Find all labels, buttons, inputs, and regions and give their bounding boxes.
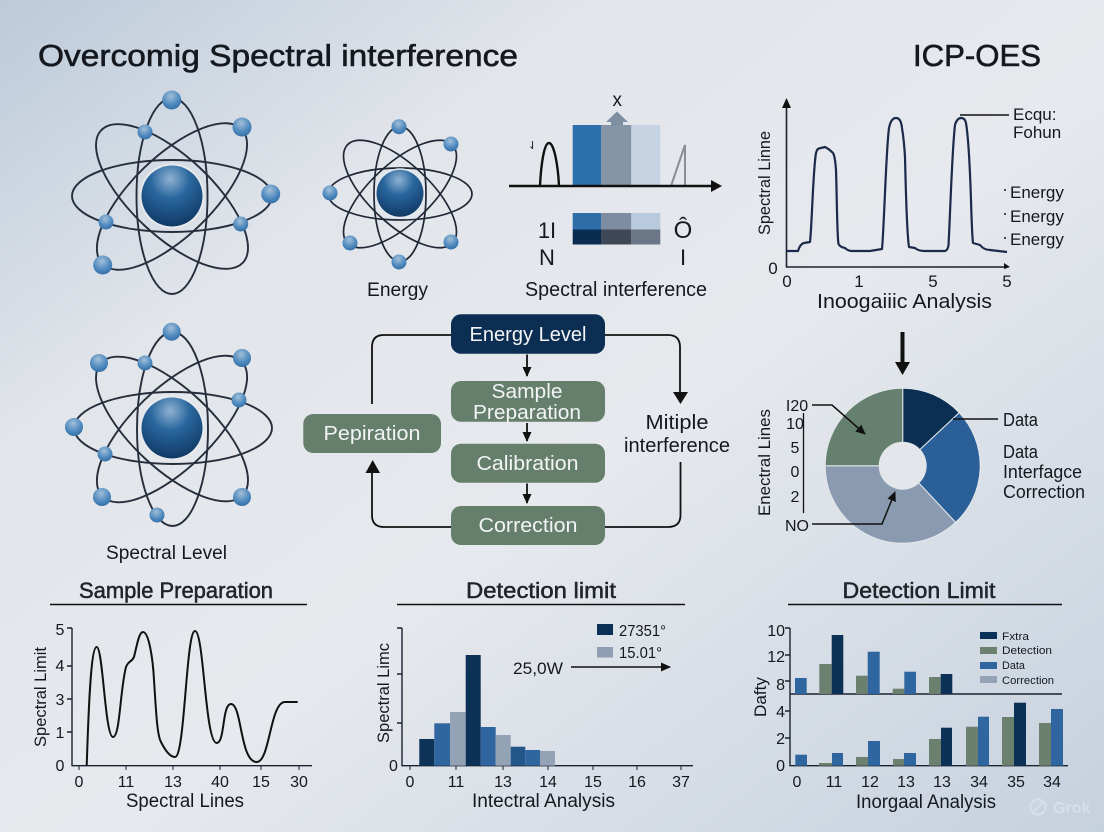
y scale labels: 0 (791, 464, 800, 481)
y scale labels: I20 (786, 398, 808, 415)
arrowhead left (366, 460, 380, 473)
axes (785, 628, 1068, 766)
y scale labels: NO (785, 518, 809, 535)
slice: navy (903, 388, 959, 466)
y axis title: Spectral Limit (31, 647, 50, 747)
callout labels (1004, 105, 1064, 249)
x tick labels: 12 (861, 774, 879, 791)
flowchart (303, 314, 730, 545)
y tick labels: 4 (776, 704, 785, 721)
x tick labels: 13 (897, 774, 915, 791)
x tick labels (406, 774, 690, 791)
donut legend text: Correction (1003, 482, 1085, 502)
donut legend text: Data (1003, 410, 1039, 430)
box: Energy Level (451, 314, 605, 354)
side labels (538, 216, 692, 270)
y scale labels: 10 (786, 416, 804, 433)
y axis title: Spectral Linne (755, 131, 774, 235)
scale line (802, 413, 804, 513)
upper bars (795, 635, 952, 694)
tick labels: 5 (928, 272, 938, 291)
y tick labels: 8 (776, 677, 785, 694)
x tick labels: 0 (75, 774, 84, 791)
label: Mitiple interference: Mitiple (646, 412, 708, 434)
x tick labels: 11 (118, 774, 134, 791)
label: Mitiple interference: interference (624, 435, 730, 457)
legend: Detection (1002, 645, 1052, 657)
x tick labels: 13 (494, 774, 512, 791)
tick labels (768, 259, 1012, 291)
axes (67, 628, 312, 766)
box: Energy Level: Energy Level (470, 324, 586, 346)
box: Sample Preparation: Sample (492, 381, 562, 403)
pointer 120 (812, 405, 865, 434)
connector: top left loop (372, 335, 451, 404)
label x: x (612, 90, 622, 111)
y tick labels: 3 (56, 692, 65, 709)
x tick labels: 13 (164, 774, 182, 791)
box: Pepiration (303, 414, 441, 453)
legend: Fxtra (1002, 631, 1030, 643)
y axis title: Dafty (751, 677, 770, 717)
chart: spectral interference diagram (509, 90, 722, 270)
arrow: calibration to correction (526, 484, 528, 503)
x tick labels: 30 (290, 774, 308, 791)
gray triangle peak (671, 145, 685, 186)
axes (397, 628, 693, 766)
watermark: Grok: Grok (1053, 800, 1090, 817)
chart: grouped bars bottom right (751, 623, 1068, 813)
x tick labels: 15 (584, 774, 602, 791)
x tick labels: 14 (539, 774, 557, 791)
x ticks (79, 766, 299, 770)
axis arrow (509, 185, 712, 187)
x tick labels: 34 (970, 774, 988, 791)
peak curve (540, 143, 559, 186)
x tick labels: 0 (793, 774, 802, 791)
x tick labels (793, 774, 1061, 791)
y tick labels: 0 (56, 758, 65, 775)
tick labels: 0 (782, 272, 792, 291)
arrowhead right (673, 392, 688, 404)
side labels: I (680, 245, 686, 270)
pointer data (953, 418, 998, 420)
box: Correction (451, 506, 605, 545)
curve (87, 631, 298, 766)
x tick labels: 11 (826, 774, 842, 791)
axes (786, 105, 1006, 267)
bars (419, 655, 555, 766)
arrow: down to pie chart (895, 332, 910, 375)
donut legend text: Interfagce (1003, 462, 1082, 482)
icon: small atom top center (322, 119, 473, 270)
lower bars (795, 703, 1063, 766)
small mark: ⇃ (528, 140, 537, 152)
x tick labels: 15 (252, 774, 270, 791)
arrow up (606, 112, 628, 125)
heading: Sample Preparation: Sample Preparation (79, 578, 273, 603)
y axis title: Enectral Lines (755, 409, 774, 516)
box: Calibration: Calibration (476, 453, 578, 475)
box: Sample Preparation: Preparation (473, 402, 581, 424)
chart: line chart bottom left (31, 622, 312, 812)
x tick labels: 37 (672, 774, 690, 791)
y tick labels: 12 (767, 649, 785, 666)
lower colour blocks (573, 213, 660, 244)
legend: 27351° (619, 623, 666, 640)
y scale labels (785, 398, 809, 535)
heading: Detection Limit: Detection Limit (842, 578, 996, 603)
slice: gray (825, 466, 956, 543)
x tick labels: 40 (211, 774, 229, 791)
chart: donut (755, 388, 1085, 543)
legend: Correction (1002, 675, 1054, 687)
donut legend text: Data (1003, 442, 1039, 462)
callout labels: Energy (1010, 230, 1064, 249)
tick labels: 5 (1002, 272, 1012, 291)
side labels: 1I (538, 218, 556, 243)
callout labels: Energy (1010, 207, 1064, 226)
y scale labels: 2 (791, 489, 800, 506)
donut legend text (1003, 410, 1085, 502)
box: Sample Preparation (451, 381, 605, 424)
legend (980, 631, 1054, 687)
callout labels: Ecqu: (1013, 105, 1056, 124)
donut hole (879, 442, 927, 490)
label: Spectral Level: Spectral Level (106, 543, 227, 564)
x axis title: Spectral Lines (126, 791, 244, 812)
y tick labels: 10 (767, 623, 785, 640)
arrow: sample to calibration (526, 423, 528, 441)
side labels: N (539, 245, 555, 270)
watermark: Grok (1030, 800, 1090, 817)
x axis arrowhead (1004, 263, 1010, 269)
x tick labels: 16 (628, 774, 646, 791)
x tick labels: 0 (406, 774, 415, 791)
legend: Data (1002, 660, 1026, 672)
title: Overcomig Spectral interference (38, 38, 518, 73)
x tick labels: 11 (448, 774, 464, 791)
label: Spectral interference: Spectral interference (525, 279, 707, 301)
legend (597, 623, 666, 662)
line series (787, 118, 1007, 252)
y tick labels: 0 (776, 758, 785, 775)
y tick labels: 1 (56, 725, 65, 742)
annotation arrow: 25,0W (513, 659, 563, 678)
callout labels: Fohun (1013, 123, 1061, 142)
y axis title: Spectral Limc (374, 643, 393, 743)
spectral bands (573, 125, 660, 186)
leader line (960, 114, 1009, 116)
y axis arrowhead (782, 98, 791, 108)
axis arrowhead (711, 180, 722, 192)
side labels: Ô (674, 216, 692, 244)
legend: 15.01° (619, 645, 662, 662)
y tick labels (767, 623, 785, 775)
tick labels: 0 (768, 259, 778, 278)
label: Energy: Energy (367, 280, 429, 301)
slice: green (825, 388, 903, 466)
chart: histogram bottom center (374, 623, 693, 812)
slice: blue (903, 413, 980, 522)
tick labels: 1 (854, 272, 864, 291)
callout labels: Energy (1010, 183, 1064, 202)
x tick labels: 34 (1043, 774, 1061, 791)
connector: bottom left loop (372, 470, 451, 527)
y tick labels (56, 622, 65, 775)
connector: bottom right loop (605, 462, 680, 527)
x tick labels (75, 774, 308, 791)
box: Pepiration: Pepiration (324, 423, 420, 445)
y tick labels: 2 (776, 731, 785, 748)
box: Calibration (451, 444, 605, 483)
chart: spectral line peaks (755, 98, 1064, 313)
heading: ICP-OES: ICP-OES (913, 38, 1041, 73)
arrow: energy to sample (526, 354, 528, 376)
connector: top right loop (605, 335, 680, 396)
x ticks (410, 766, 681, 770)
y tick labels: 5 (56, 622, 65, 639)
heading: Detection limit: Detection limit (466, 578, 616, 603)
y zero label: 0 (389, 758, 398, 775)
y scale labels: 5 (791, 440, 800, 457)
x tick labels: 13 (933, 774, 951, 791)
x axis title: Intectral Analysis (472, 791, 615, 812)
label: Mitiple interference (624, 412, 730, 457)
x axis title: Inoogaiiic Analysis (817, 291, 992, 313)
icon: large atom top left (72, 90, 280, 294)
x tick labels: 35 (1007, 774, 1025, 791)
y tick labels: 4 (56, 658, 65, 675)
box: Correction: Correction (478, 515, 578, 537)
icon: large atom left middle (65, 323, 272, 526)
pointer NO (812, 492, 895, 524)
x axis title: Inorgaal Analysis (856, 792, 996, 813)
